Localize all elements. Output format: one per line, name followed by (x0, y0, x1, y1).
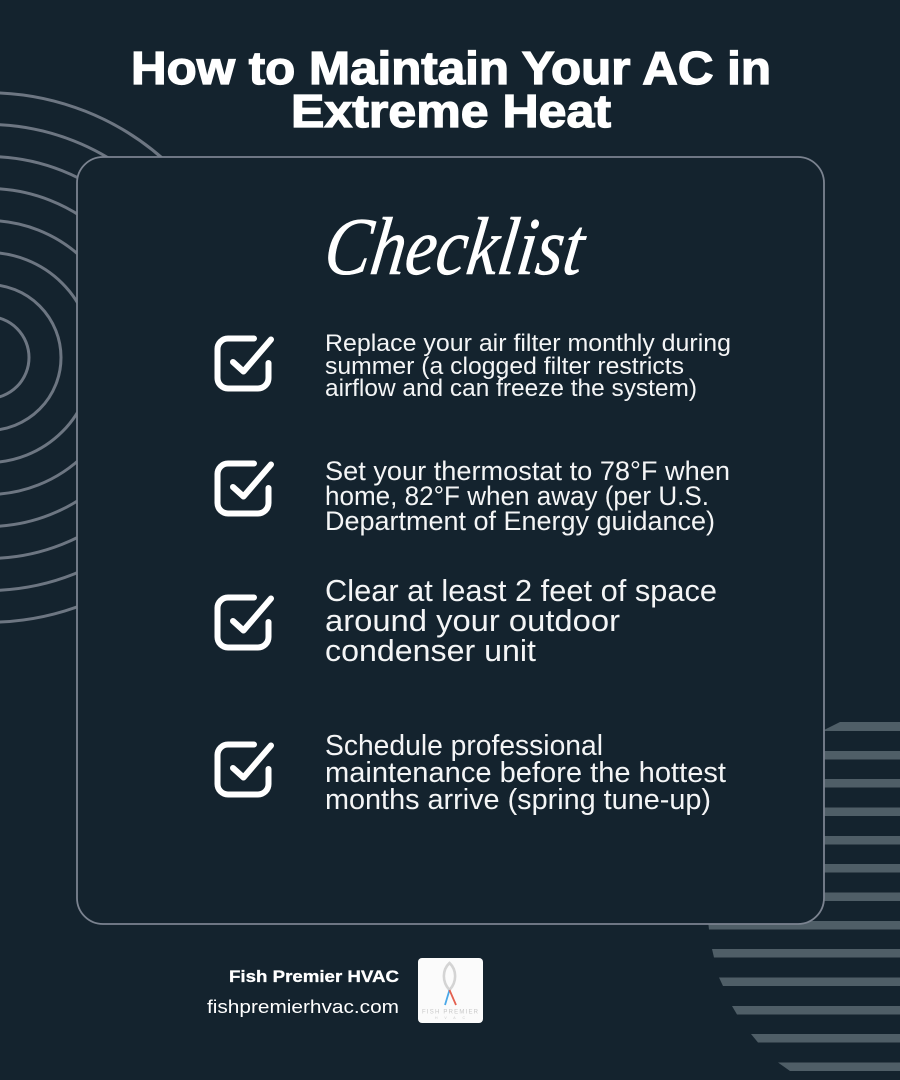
checklist item 4 text: months arrive (spring tune-up) (325, 784, 711, 816)
checklist item 1 text: summer (a clogged filter restricts (325, 353, 684, 380)
icon: checkbox 4 (218, 744, 271, 794)
icon: checkbox 2 (218, 464, 271, 514)
title: How to Maintain Your AC in (131, 42, 771, 94)
footer: company name and website: Fish Premier HVAC (229, 967, 399, 986)
checklist item 2 text (325, 456, 730, 536)
panel: checklist (77, 157, 824, 924)
logo: Fish Premier HVAC: FISH PREMIER (422, 1010, 479, 1016)
checklist item 2 text: home, 82°F when away (per U.S. (325, 481, 709, 511)
checklist item 2 text: Set your thermostat to 78°F when (325, 456, 730, 486)
decorative striped circle (708, 722, 900, 1071)
checklist item 3 text: Clear at least 2 feet of space (325, 573, 717, 608)
checklist item 3 text: condenser unit (325, 633, 536, 668)
checklist item 1 text: airflow and can freeze the system) (325, 375, 697, 402)
icon: checkbox 3 (218, 598, 271, 648)
checklist item 1 text: Replace your air filter monthly during (325, 330, 731, 357)
checklist item 1 text (325, 330, 731, 402)
footer: company name and website: fishpremierhvac.com (207, 997, 399, 1017)
title (131, 42, 771, 137)
checklist item 2 text: Department of Energy guidance) (325, 506, 715, 536)
logo: Fish Premier HVAC: HVAC (435, 1016, 465, 1020)
logo: Fish Premier HVAC (418, 958, 483, 1023)
checklist item 4 text (325, 730, 726, 816)
title: Extreme Heat (291, 85, 611, 137)
decorative concentric rings (0, 93, 253, 622)
checklist item 3 text (325, 573, 717, 668)
checklist item 4 text: Schedule professional (325, 730, 603, 762)
heading: Checklist: Checklist (319, 201, 592, 292)
footer: company name and website (207, 967, 399, 1017)
checklist item 4 text: maintenance before the hottest (325, 757, 726, 789)
checklist item 3 text: around your outdoor (325, 603, 620, 638)
icon: checkbox 1 (218, 338, 271, 388)
